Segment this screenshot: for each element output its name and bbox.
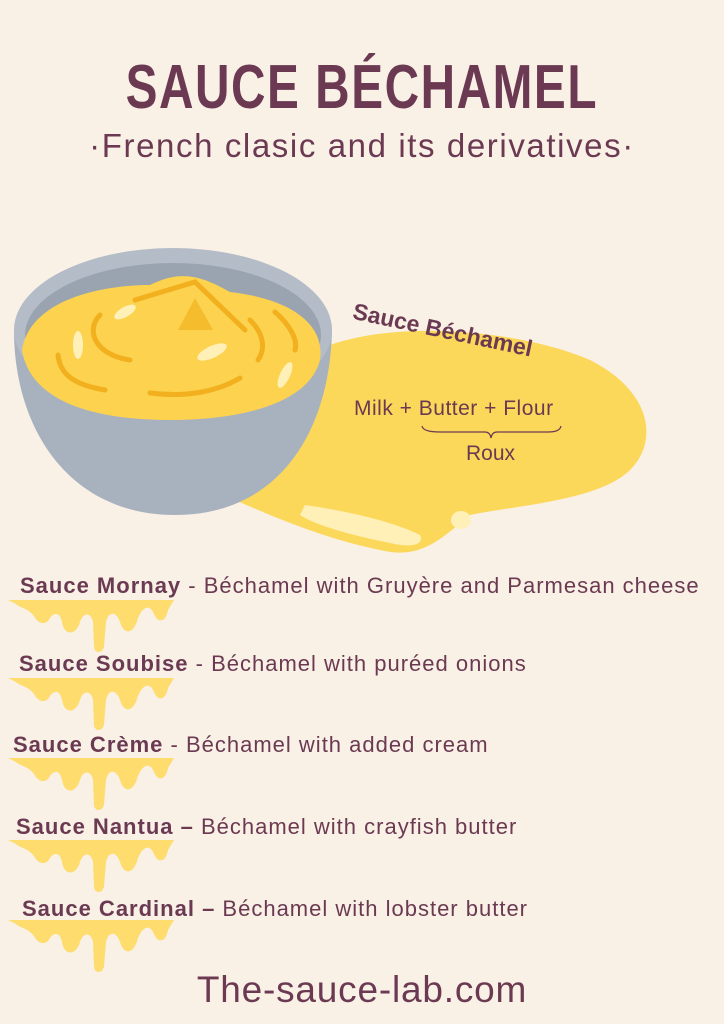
illustration: bowl and sauce [14,248,646,553]
item: Nantua [8,814,517,892]
item: Soubise: Sauce Soubise - Béchamel with puréed onions [19,651,527,676]
title: SAUCE BÉCHAMEL [126,53,598,122]
item: Cardinal [8,896,528,972]
brace under Butter + Flour [422,426,561,438]
item: Crème [8,732,489,810]
item: Mornay [8,573,700,652]
subtitle: ·French clasic and its derivatives· [89,127,635,164]
formula: Milk + Butter + Flour [354,397,554,420]
bowl [14,248,332,515]
item: Nantua: Sauce Nantua – Béchamel with crayfish butter [16,814,517,839]
roux label: Roux [466,442,515,465]
sauce puddle [235,331,646,553]
item: Mornay: Sauce Mornay - Béchamel with Gruyère and Parmesan cheese [20,573,700,598]
label: Sauce Béchamel: Sauce Béchamel [351,298,535,361]
footer: The-sauce-lab.com [197,969,527,1010]
item: Crème: Sauce Crème - Béchamel with added cream [13,732,489,757]
item: Cardinal: Sauce Cardinal – Béchamel with lobster butter [22,896,528,921]
item: Soubise [8,651,527,730]
